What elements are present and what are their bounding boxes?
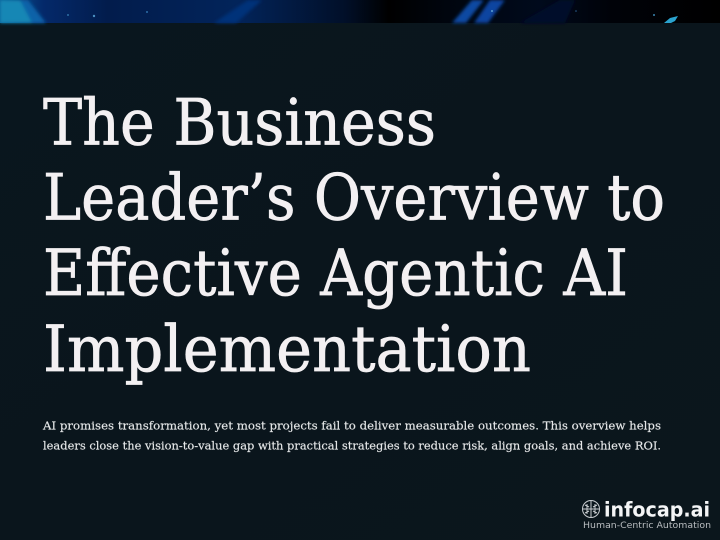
subtitle text block: AI promises transformation, yet most projects fail to deliver measurable outcomes. This overview helps — [42, 418, 661, 432]
logo tagline: Human-Centric Automation — [583, 521, 711, 531]
title: Implementation — [43, 313, 531, 387]
title — [43, 86, 665, 387]
top image strip — [0, 0, 720, 23]
icon: brain — [582, 500, 600, 518]
title: Effective Agentic AI — [43, 237, 628, 311]
logo: infocap.ai — [582, 498, 711, 531]
subtitle text block: leaders close the vision-to-value gap with practical strategies to reduce risk, align goals, and achieve ROI. — [43, 438, 661, 452]
title: The Business — [43, 86, 436, 160]
logo wordmark: infocap.ai — [604, 498, 710, 522]
title: Leader’s Overview to — [43, 162, 665, 236]
subtitle text block — [42, 418, 661, 452]
